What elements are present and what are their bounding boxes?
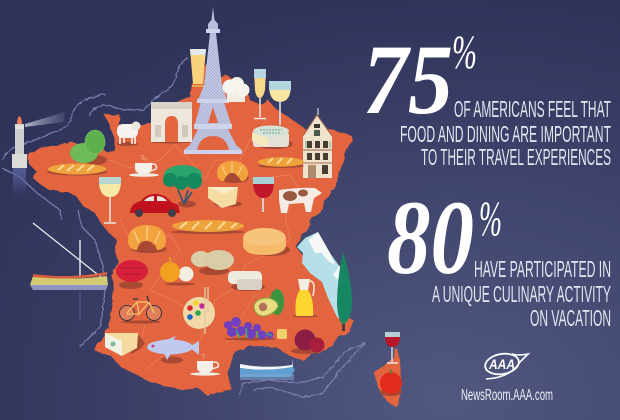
fish (147, 336, 199, 364)
chef hat (222, 77, 250, 102)
half-timbered house (303, 108, 332, 178)
tomato (380, 369, 402, 396)
AAA logo (484, 351, 528, 379)
cheese wedge (208, 187, 242, 208)
Corsica (374, 347, 401, 408)
tree (163, 165, 202, 208)
map of France (28, 62, 353, 396)
cow (279, 188, 322, 213)
website: NewsRoom.AAA.com (461, 387, 553, 404)
Arc de Triomphe (151, 102, 192, 144)
text: 80 percent description (432, 256, 611, 331)
cup of coffee (129, 155, 159, 177)
statistic: 75 percent: 75 (363, 24, 453, 135)
rivers and regional borders (105, 118, 300, 370)
white wine glass left (99, 177, 121, 223)
lighthouse (12, 112, 65, 196)
Eiffel Tower (184, 7, 242, 154)
beer glass (190, 49, 206, 87)
sheep (116, 122, 140, 146)
onion (160, 257, 195, 286)
plums (291, 330, 324, 354)
lavender (224, 317, 287, 340)
avocado (254, 289, 284, 316)
statistic: 80 percent: % (479, 190, 502, 246)
baguette left (47, 164, 107, 176)
blue cheese wedge (105, 333, 145, 356)
white wine glass (269, 81, 291, 125)
paint palette (183, 287, 215, 334)
croissant top (217, 161, 249, 183)
white rind cheese (228, 271, 265, 291)
cypress (337, 252, 352, 331)
red wine glass (253, 177, 274, 212)
red car (130, 194, 180, 217)
potatoes (191, 250, 234, 275)
lettuce (70, 130, 107, 165)
coffee cup lower (190, 354, 220, 376)
statistic: 75 percent: % (452, 26, 477, 79)
AAA logo: AAA (488, 356, 515, 372)
baguette right (258, 157, 304, 168)
red wine glass Corsica (385, 332, 400, 363)
bicycle (120, 296, 162, 324)
coastal wave lines (2, 58, 365, 397)
baguette long (171, 220, 245, 234)
statistic: 80 percent: 80 (387, 179, 474, 296)
crab (116, 260, 148, 289)
text: 75 percent description (400, 96, 611, 170)
fishing boat (240, 358, 295, 380)
champagne flute (254, 69, 266, 118)
Alps (297, 232, 342, 320)
olive oil jar (292, 279, 318, 317)
croissant lower (128, 225, 167, 253)
blue cheese wheel (252, 126, 293, 149)
sailboat (30, 223, 108, 320)
round yellow cheese (243, 228, 290, 256)
